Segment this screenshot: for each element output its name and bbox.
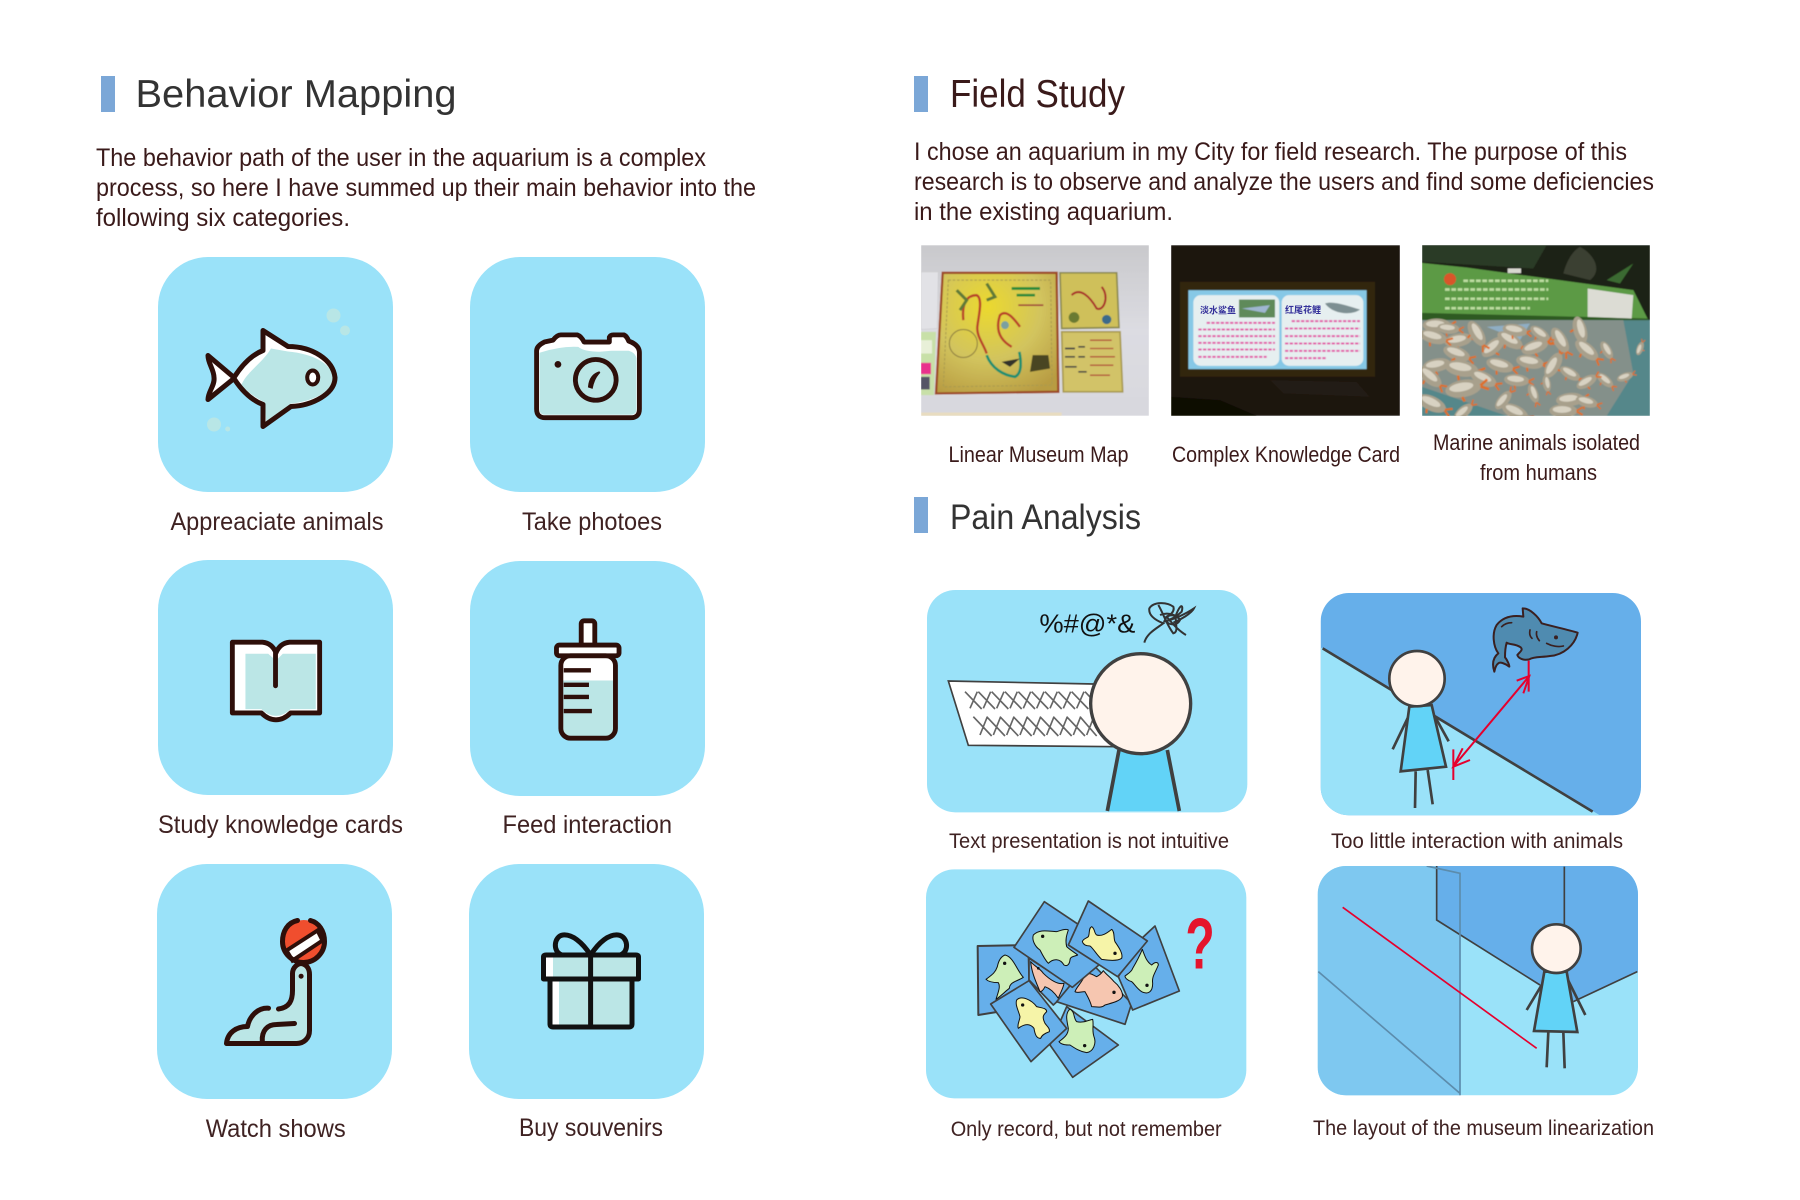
panel: pain analysis [914,497,1654,1141]
figure: person [1389,651,1449,808]
question mark: ? [1185,904,1215,985]
tile: feed interaction [470,561,705,839]
label: take photos: Take photoes [522,508,662,536]
caption: complex knowledge card: Complex Knowledge Card [1172,442,1400,467]
figure: person from behind [1091,654,1191,811]
caption: marine animals isolated [1433,430,1640,485]
illustration: linear museum layout [1318,865,1638,1095]
text block: field study intro: I chose an aquarium in my City for field research. The purpose of this [914,138,1627,166]
tile: study knowledge cards [158,560,403,839]
caption: marine animals isolated: from humans [1480,460,1597,485]
heading: field study: Field Study [950,73,1125,116]
text block: behavior mapping intro: following six categories. [96,204,350,232]
tile: take photos [470,257,705,536]
label: watch shows: Watch shows [206,1115,346,1143]
icon: gift box [544,935,638,1027]
photo: marine animals [1422,245,1650,416]
icon: seal with ball [226,920,325,1044]
heading marker: field study [914,76,928,112]
figure: person [1527,924,1585,1068]
icon: feeding bottle [556,621,619,738]
red path line [1343,907,1537,1048]
caption: linear museum layout: The layout of the museum linearization [1313,1116,1654,1140]
icon: fish [207,308,350,432]
icon: open book [232,642,320,720]
photo: knowledge card [1171,245,1400,416]
text block: behavior mapping intro: process, so here I have summed up their main behavior into the [96,174,756,202]
heading marker: pain analysis [914,497,928,533]
heading: pain analysis: Pain Analysis [950,498,1141,537]
icon: camera [537,335,639,418]
text block: field study intro: in the existing aquarium. [914,198,1173,226]
label: feed interaction: Feed interaction [502,811,672,839]
text: garbled symbols: %#@*& [1039,609,1135,639]
caption: text not intuitive: Text presentation is not intuitive [949,829,1229,853]
illustration: text not intuitive [927,590,1247,812]
label: appreciate animals: Appreaciate animals [170,508,384,536]
sign with crossed text [948,681,1117,747]
caption: linear museum map: Linear Museum Map [948,442,1128,467]
caption: record but not remember: Only record, but not remember [951,1117,1222,1141]
tile: buy souvenirs [469,864,704,1142]
illustration: record but not remember [926,869,1246,1098]
panel: field study [914,73,1654,485]
arrow: distance between person and animal [1453,661,1529,780]
caption: too little interaction: Too little interaction with animals [1331,829,1623,853]
text block: field study intro: research is to observe and analyze the users and find some deficiencies [914,168,1654,196]
text: card titles: 红尾花鲤 [1285,304,1321,315]
icon: scribble [1144,603,1194,643]
illustration: too little interaction [1321,593,1641,815]
heading marker: behavior mapping [101,76,115,112]
caption: marine animals isolated: Marine animals isolated [1433,430,1640,455]
text: card titles [1200,304,1321,316]
text block: behavior mapping intro: The behavior path of the user in the aquarium is a complex [96,144,706,172]
tile: watch shows [157,864,392,1143]
text: card titles: 淡水鲨鱼 [1200,304,1236,316]
photo: museum map [921,245,1149,416]
panel: behavior mapping [96,73,756,1143]
icon: shark [1493,608,1578,672]
heading: behavior mapping: Behavior Mapping [136,73,456,116]
pile of fish cards [978,901,1179,1077]
tile: appreciate animals [158,257,393,536]
text block: behavior mapping intro [96,144,756,232]
label: buy souvenirs: Buy souvenirs [519,1114,663,1142]
text block: field study intro [914,138,1654,226]
label: study knowledge cards: Study knowledge cards [158,811,403,839]
